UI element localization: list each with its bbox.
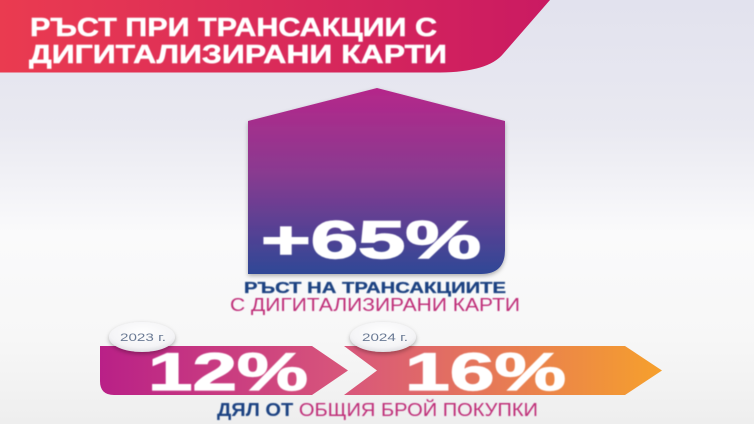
big number +65%: +65% [261,211,481,270]
arrow: 2023 share [100,343,348,402]
title [29,12,447,69]
share caption: ДЯЛ ОТ ОБЩИЯ БРОЙ ПОКУПКИ [217,399,538,420]
growth caption: РЪСТ НА ТРАНСАКЦИИТЕ [244,280,506,297]
title: РЪСТ ПРИ ТРАНСАКЦИИ С [30,12,437,42]
badge: 2024: 2024 г. [362,332,408,344]
badge: 2024 [350,322,416,352]
value 12%: 12% [148,343,308,402]
growth caption: С ДИГИТАЛИЗИРАНИ КАРТИ [230,295,520,315]
title: ДИГИТАЛИЗИРАНИ КАРТИ [29,39,447,69]
badge: 2023: 2023 г. [120,332,166,344]
growth caption [230,280,520,315]
badge: 2023 [109,322,175,352]
arrow: 2024 share [344,343,662,402]
value 16%: 16% [405,343,566,402]
panel: growth house shape [248,88,505,274]
panel: title banner [0,0,550,72]
